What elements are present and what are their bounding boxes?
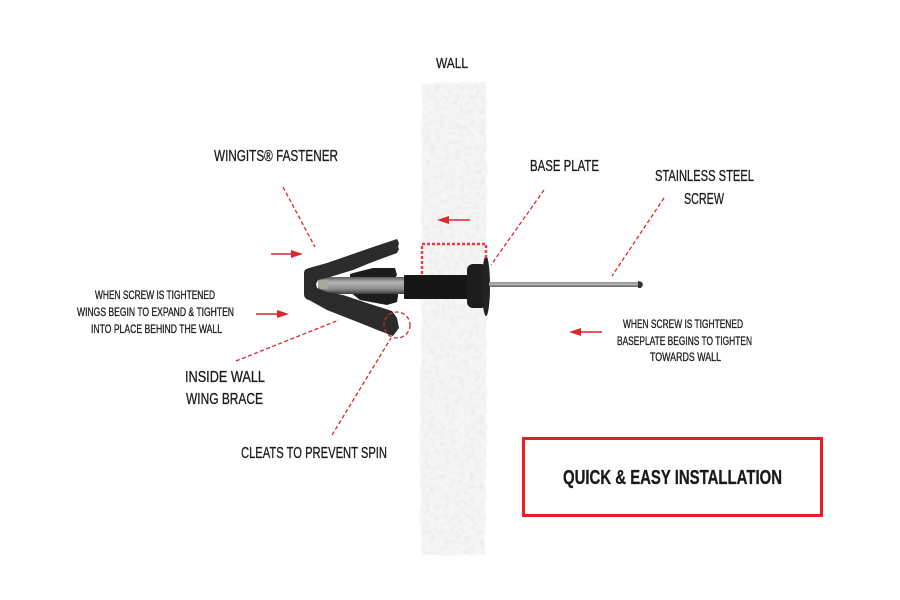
base flange [467,264,487,308]
text block: wings expand note [77,288,234,336]
screw tip [638,281,643,288]
fastener illustration [304,239,643,336]
arrow: right upper [271,250,303,258]
callout: quick and easy installation: QUICK & EASY INSTALLATION [563,467,782,489]
text block: wings expand note: INTO PLACE BEHIND THE WALL [91,322,222,336]
leader lines and dashed highlights [236,187,664,435]
arrow: wall left [437,216,470,224]
arrow: baseplate left [569,328,602,336]
threaded collar [404,275,468,299]
text block: wings expand note: WHEN SCREW IS TIGHTENED [95,288,215,302]
text block: baseplate note: BASEPLATE BEGINS TO TIGHTEN [617,334,752,348]
text block: baseplate note: TOWARDS WALL [650,350,721,364]
shaft [318,277,406,294]
arrow: right lower [256,310,289,318]
label: stainless steel screw: SCREW [684,191,725,208]
label: base plate: BASE PLATE [530,158,599,175]
label: inside wall wing brace: WING BRACE [186,391,263,408]
label: stainless steel screw [655,168,754,208]
label: wingits fastener: WINGITS® FASTENER [214,148,338,165]
label: wall: WALL [436,55,468,72]
text block: baseplate note: WHEN SCREW IS TIGHTENED [623,317,743,331]
label: inside wall wing brace: INSIDE WALL [185,369,265,386]
text block: wings expand note: WINGS BEGIN TO EXPAND & TIGHTEN [77,305,234,319]
callout: quick and easy installation [524,438,822,516]
text block: baseplate note [617,317,752,364]
screw shaft [489,282,639,287]
label: stainless steel screw: STAINLESS STEEL [655,168,754,185]
top wing, body and lower wing [304,239,399,336]
label: cleats to prevent spin: CLEATS TO PREVENT SPIN [241,445,387,462]
shaft tip [318,280,328,289]
inner wing braces [350,268,398,305]
label: inside wall wing brace [185,369,265,408]
wall [420,82,487,555]
base plate [482,256,490,316]
